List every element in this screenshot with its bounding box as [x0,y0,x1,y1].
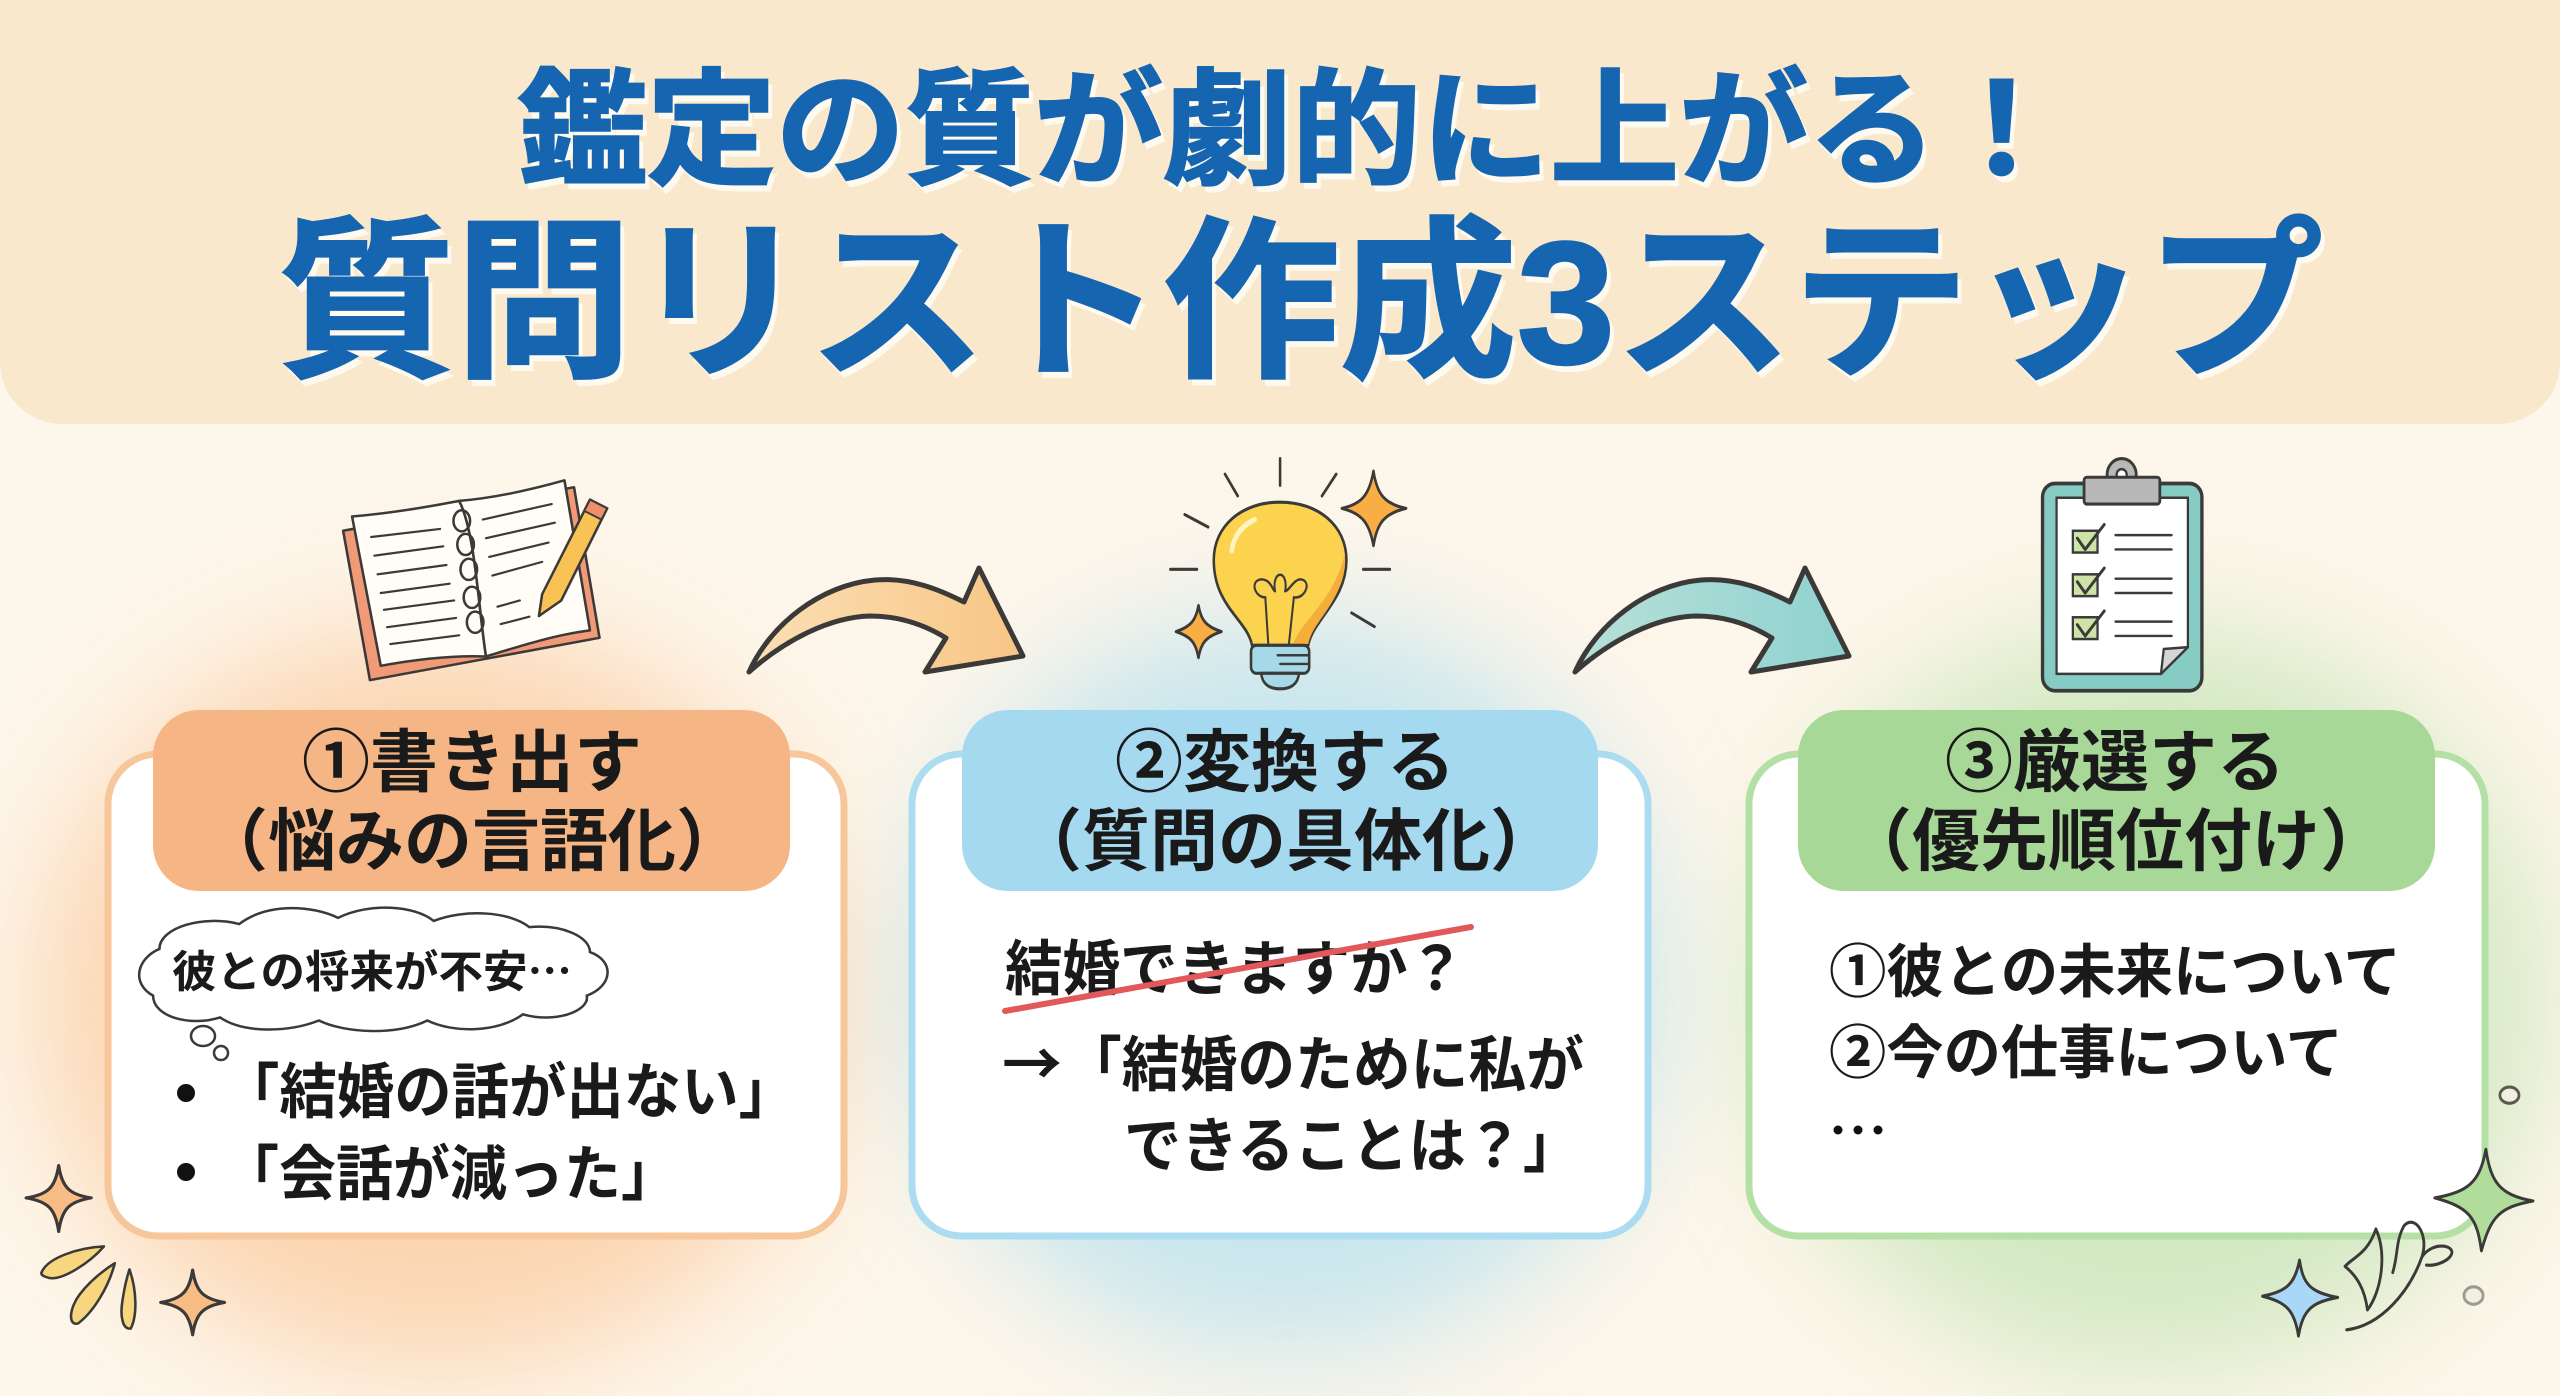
heading text 2: ②変換する [1115,725,1455,801]
card 2 [912,754,1648,1236]
priority list: ②今の仕事について [1829,1021,2343,1086]
title line 2: 質問リスト作成3ステップ [278,205,2323,400]
card 1 [108,754,844,1236]
background glow: green [1760,630,2540,1370]
heading text 3: ③厳選する [1945,725,2285,801]
bullet list: 「結婚の話が出ない」 [222,1059,796,1126]
improved question: できることは？」 [1124,1113,1580,1180]
thought bubble [139,908,608,1060]
thought bubble: 彼との将来が不安… [172,936,572,1000]
improved question: → [1002,1017,1062,1104]
heading text 1: （悩みの言語化） [200,804,744,880]
priority list [1829,940,2401,1134]
title line 1: 鑑定の質が劇的に上がる！ [518,60,2066,201]
heading tab 2 [962,710,1598,891]
card 3 [1749,754,2485,1236]
bullet list [177,1059,796,1208]
improved question: 「結婚のために私が [1064,1032,1584,1099]
improved question [1002,1017,1584,1180]
title [278,60,2323,400]
panel: step 3 [1749,710,2485,1236]
panel: step 2 [912,710,1648,1236]
background glow: orange [40,630,840,1370]
heading text 2: （質問の具体化） [1014,804,1558,880]
arrow: step 1 to step 2 [749,568,1023,672]
icon: checklist clipboard [2043,459,2202,691]
heading text 1: ①書き出す [302,725,642,801]
arrow: step 2 to step 3 [1575,568,1849,672]
heading tab 3 [1798,710,2435,891]
icon: light bulb [1170,459,1406,689]
heading text 2 [1014,725,1558,880]
header band [0,0,2560,424]
bullet list: 「会話が減った」 [222,1141,678,1208]
panel: step 1 [108,710,844,1236]
heading text 3: （優先順位付け） [1844,804,2388,880]
priority list: ①彼との未来について [1829,940,2401,1005]
heading text 3 [1844,725,2388,880]
heading tab 1 [153,710,790,891]
background glow: blue [910,615,1660,1355]
heading text 1 [200,725,744,880]
crossed-out question: 結婚できますか？ [1005,936,1465,1003]
icon: notebook and pencil [343,480,607,680]
decoration: right sparkles and flourish [2263,1087,2533,1336]
decoration: left sparkles [26,1166,225,1335]
